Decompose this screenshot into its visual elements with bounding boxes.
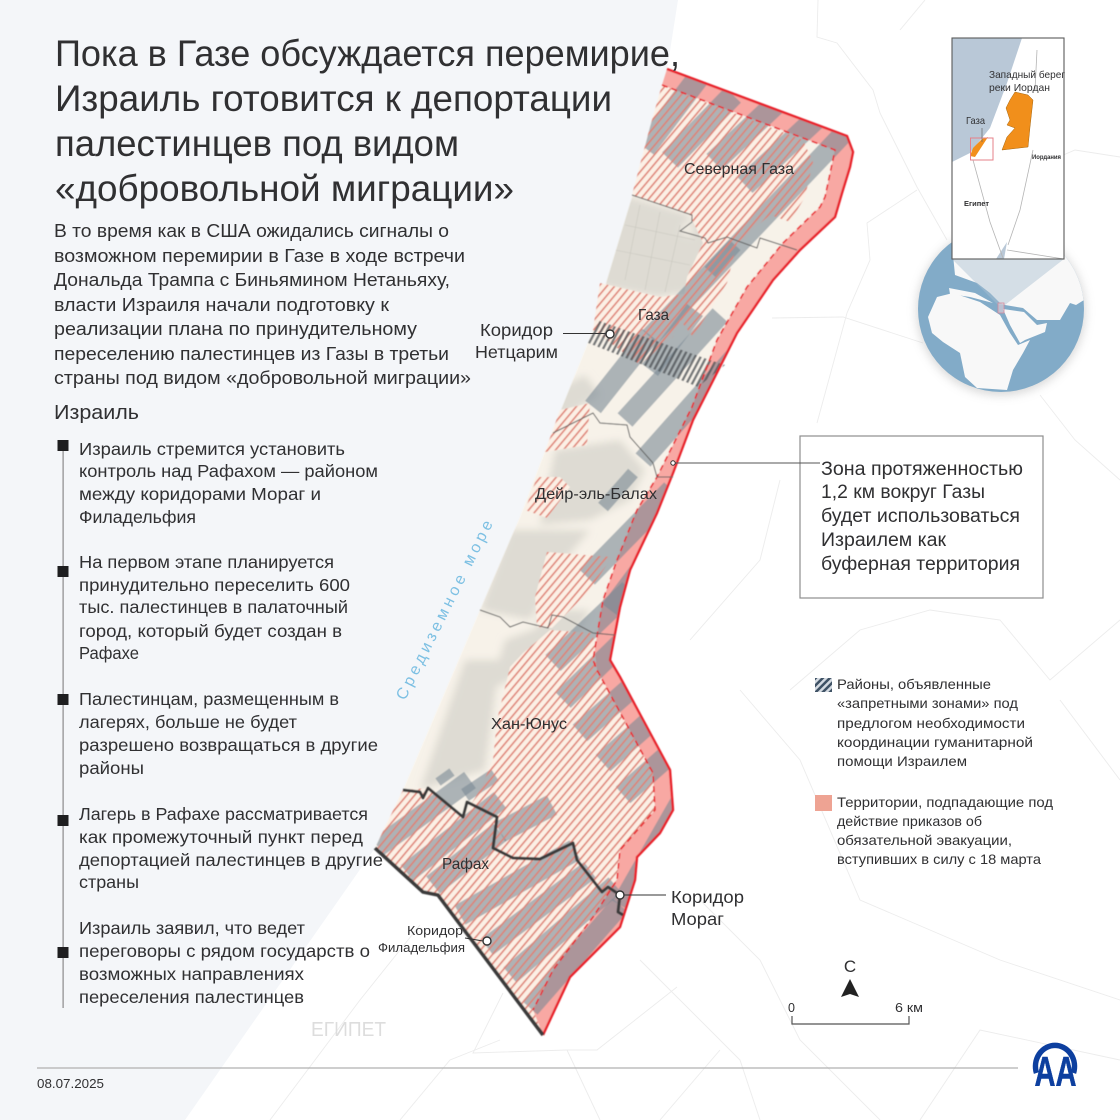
bullet 2: [79, 552, 350, 663]
inset map: Египет: [964, 199, 989, 208]
bullet 5: Израиль заявил, что ведет: [79, 918, 305, 938]
inset map: [952, 38, 1065, 259]
buffer outer edge: [543, 69, 853, 1035]
bullet 2: На первом этапе планируется: [79, 552, 334, 572]
West Bank: [1002, 92, 1033, 150]
Egypt label: ЕГИПЕТ: [311, 1019, 386, 1041]
map labels: Рафах: [442, 856, 489, 873]
Philadelphi callout: Коридор: [407, 923, 463, 938]
Morag corridor line: [403, 788, 623, 915]
globe view wedge: [952, 259, 1064, 305]
legend: evacuation zones: вступивших в силу с 18 марта: [837, 852, 1041, 867]
hatched zones base: [375, 85, 813, 1035]
scale bar: 0: [788, 1001, 795, 1015]
hatched evacuation zones: [375, 85, 813, 1035]
buffer zone callout: Зона протяженностью: [821, 459, 1023, 480]
Philadelphi callout: [378, 923, 491, 955]
buffer zone callout: будет использоваться: [821, 506, 1020, 527]
Morag callout: Коридор: [671, 887, 744, 907]
intro text: [54, 220, 471, 388]
intro text: В то время как в США ожидались сигналы о: [54, 220, 449, 241]
buffer zone fill: [533, 69, 853, 1035]
buffer zone callout: Израилем как: [821, 530, 947, 551]
Netzarim callout: [475, 320, 614, 362]
bullet 1: между коридорами Мораг и: [79, 484, 321, 504]
inset borders: [973, 50, 1064, 259]
title: Пока в Газе обсуждается перемирие,: [55, 32, 680, 74]
Philadelphi callout: Филадельфия: [378, 940, 465, 955]
buffer zone callout: [671, 436, 1043, 598]
legend: no-go zones: [815, 677, 1033, 769]
road network: [270, 0, 1120, 1120]
north arrow: [841, 957, 859, 997]
legend: evacuation zones: обязательной эвакуации,: [837, 833, 1012, 848]
bullet 5: переговоры с рядом государств о: [79, 941, 370, 961]
inset gulf: [996, 242, 1007, 259]
inset map: Западный берег: [989, 69, 1065, 81]
logo: Anadolu Agency: AA: [1034, 1048, 1076, 1095]
bullet 3: разрешено возвращаться в другие: [79, 735, 378, 755]
section heading: Израиль: [54, 401, 139, 424]
map labels: Газа: [638, 307, 669, 324]
bullet 1: контроль над Рафахом — районом: [79, 461, 378, 481]
intro text: переселению палестинцев из Газы в третьи: [54, 343, 449, 364]
scale bar: 6 км: [895, 1001, 923, 1015]
Netzarim corridor hatch: [588, 320, 725, 387]
governorate borders: [480, 195, 797, 635]
legend: evacuation zones: действие приказов об: [837, 814, 982, 829]
map labels: Дейр-эль-Балах: [535, 486, 657, 503]
no-go zone stripes: [378, 78, 845, 1008]
bullet 2: город, который будет создан в: [79, 621, 342, 641]
Gaza city street grid: [630, 226, 684, 292]
bullet 3: районы: [79, 758, 144, 778]
bullet 1: [79, 439, 378, 527]
globe land: [928, 255, 1090, 390]
bullet 5: возможных направлениях: [79, 964, 304, 984]
bullet 4: [79, 804, 383, 892]
intro text: власти Израиля начали подготовку к: [54, 294, 390, 315]
Philadelphi corridor border: [375, 848, 543, 1035]
date: 08.07.2025: [37, 1077, 104, 1091]
title: «добровольной миграции»: [55, 167, 514, 209]
intro text: возможном перемирии в Газе в ходе встречи: [54, 245, 465, 266]
title: палестинцев под видом: [55, 122, 459, 164]
scale bar: [788, 1001, 923, 1024]
globe locator: [998, 303, 1004, 313]
buffer zone callout: 1,2 км вокруг Газы: [821, 482, 985, 503]
map labels: Северная Газа: [684, 161, 794, 178]
Morag callout: [616, 887, 744, 929]
bullet 4: как промежуточный пункт перед: [79, 827, 363, 847]
legend: no-go zones: координации гуманитарной: [837, 735, 1033, 750]
title: Израиль готовится к депортации: [55, 77, 612, 119]
footer rule: [37, 1067, 1018, 1069]
buffer inner dashed edge: [533, 85, 835, 1010]
bullet 5: переселения палестинцев: [79, 987, 304, 1007]
title: [55, 32, 680, 209]
bullet 5: [79, 918, 370, 1007]
inset map: Иордания: [1032, 154, 1061, 161]
Netzarim callout: Нетцарим: [475, 342, 558, 362]
bullet 2: тыс. палестинцев в палаточный: [79, 597, 348, 617]
legend: no-go zones: «запретными зонами» под: [837, 696, 1018, 711]
bullet 1: Филадельфия: [79, 507, 196, 527]
land of the strip: [375, 69, 853, 1035]
timeline with bullets: [58, 440, 68, 1008]
bullet 1: Израиль стремится установить: [79, 439, 345, 459]
bullet 2: принудительно переселить 600: [79, 575, 350, 595]
map of Gaza strip: [375, 69, 853, 1035]
intro text: Дональда Трампа с Биньямином Нетаньяху,: [54, 269, 450, 290]
bullet 4: Лагерь в Рафахе рассматривается: [79, 804, 368, 824]
bullet 4: страны: [79, 872, 139, 892]
legend: no-go zones: помощи Израилем: [837, 754, 967, 769]
inset sea: [952, 38, 1022, 162]
north arrow: С: [844, 957, 856, 976]
urban patches: [421, 196, 703, 788]
intro text: страны под видом «добровольной миграции»: [54, 367, 471, 388]
logo: Anadolu Agency: [1034, 1045, 1076, 1095]
sea label: Средиземное море: [393, 518, 497, 703]
legend: evacuation zones: Территории, подпадающие под: [837, 795, 1053, 810]
legend: no-go zones: Районы, объявленные: [837, 677, 991, 692]
bullet 3: лагерях, больше не будет: [79, 712, 297, 732]
map labels: Хан-Юнус: [491, 716, 567, 733]
bullet 3: Палестинцам, размещенным в: [79, 689, 339, 709]
Morag callout: Мораг: [671, 909, 724, 929]
inset map: реки Иордан: [989, 82, 1050, 94]
map labels: [442, 161, 794, 873]
Gaza on inset: [970, 137, 988, 157]
globe: [917, 226, 1090, 395]
intro text: реализации плана по принудительному: [54, 318, 418, 339]
bullet 4: депортацией палестинцев в другие: [79, 850, 383, 870]
inset locator: [970, 138, 993, 160]
bullet 2: Рафахе: [79, 643, 139, 663]
inset map: Газа: [966, 115, 985, 127]
bullet 3: [79, 689, 378, 778]
legend: no-go zones: предлогом необходимости: [837, 716, 1025, 731]
buffer zone callout: буферная территория: [821, 554, 1020, 575]
legend: evacuation zones: [815, 795, 1053, 867]
Netzarim callout: Коридор: [480, 320, 553, 340]
sea: [0, 0, 678, 1120]
